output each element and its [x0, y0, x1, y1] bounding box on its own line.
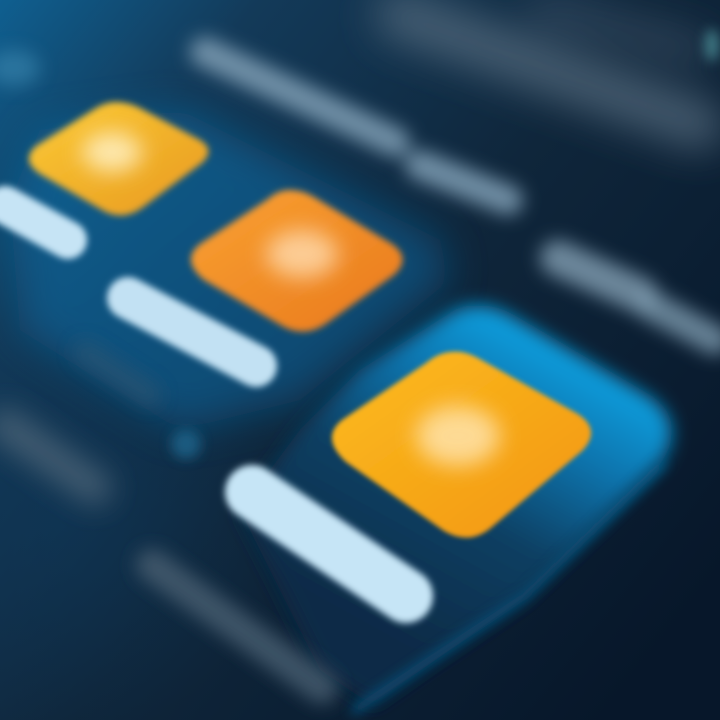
icon: orange diamond: [191, 190, 403, 332]
text streak: right: [558, 258, 715, 340]
text streak: top heading: [205, 52, 508, 200]
bar: third pale bar: [252, 492, 406, 596]
bar: second pale bar: [128, 298, 256, 366]
panel: large bright blue card: [240, 305, 672, 712]
icon: amber diamond: [332, 352, 591, 538]
glow: top left: [0, 50, 40, 86]
text streak: bottom: [152, 565, 322, 688]
icon: yellow diamond: [29, 102, 209, 216]
text streak: top right: [400, 8, 700, 125]
dot: small blurred marker: [171, 429, 201, 459]
glow: top right teal: [705, 29, 719, 61]
text streak: centre left faint: [85, 352, 150, 395]
text streak: lower left: [5, 425, 95, 488]
panel: upper left blue card: [10, 110, 450, 430]
bar: first pale bar: [5, 205, 68, 240]
